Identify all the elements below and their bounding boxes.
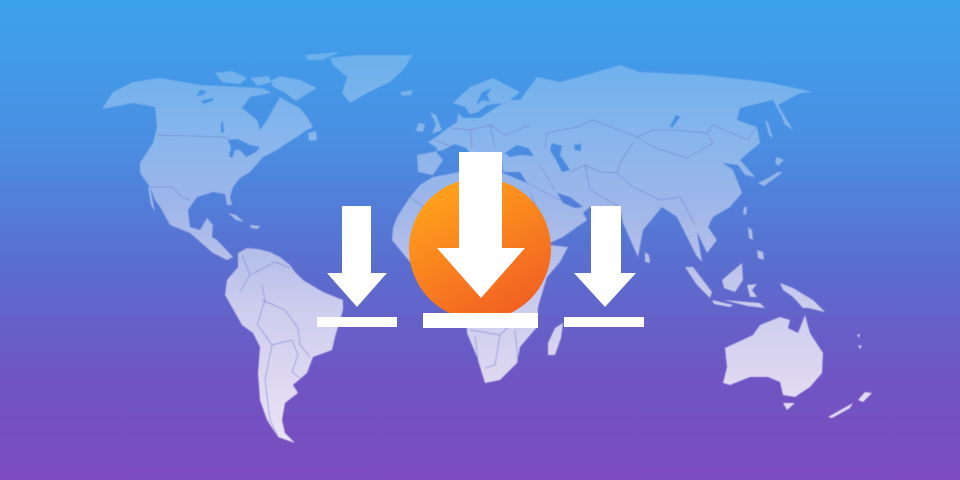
icon: left download arrow: [317, 206, 397, 327]
icon: right download arrow: [564, 206, 644, 327]
icon: centre download arrow: [423, 152, 538, 328]
map: land masses: [102, 52, 872, 443]
icon: orange circle: [409, 178, 551, 320]
world map: [102, 52, 872, 443]
map: country borders: [150, 120, 757, 437]
